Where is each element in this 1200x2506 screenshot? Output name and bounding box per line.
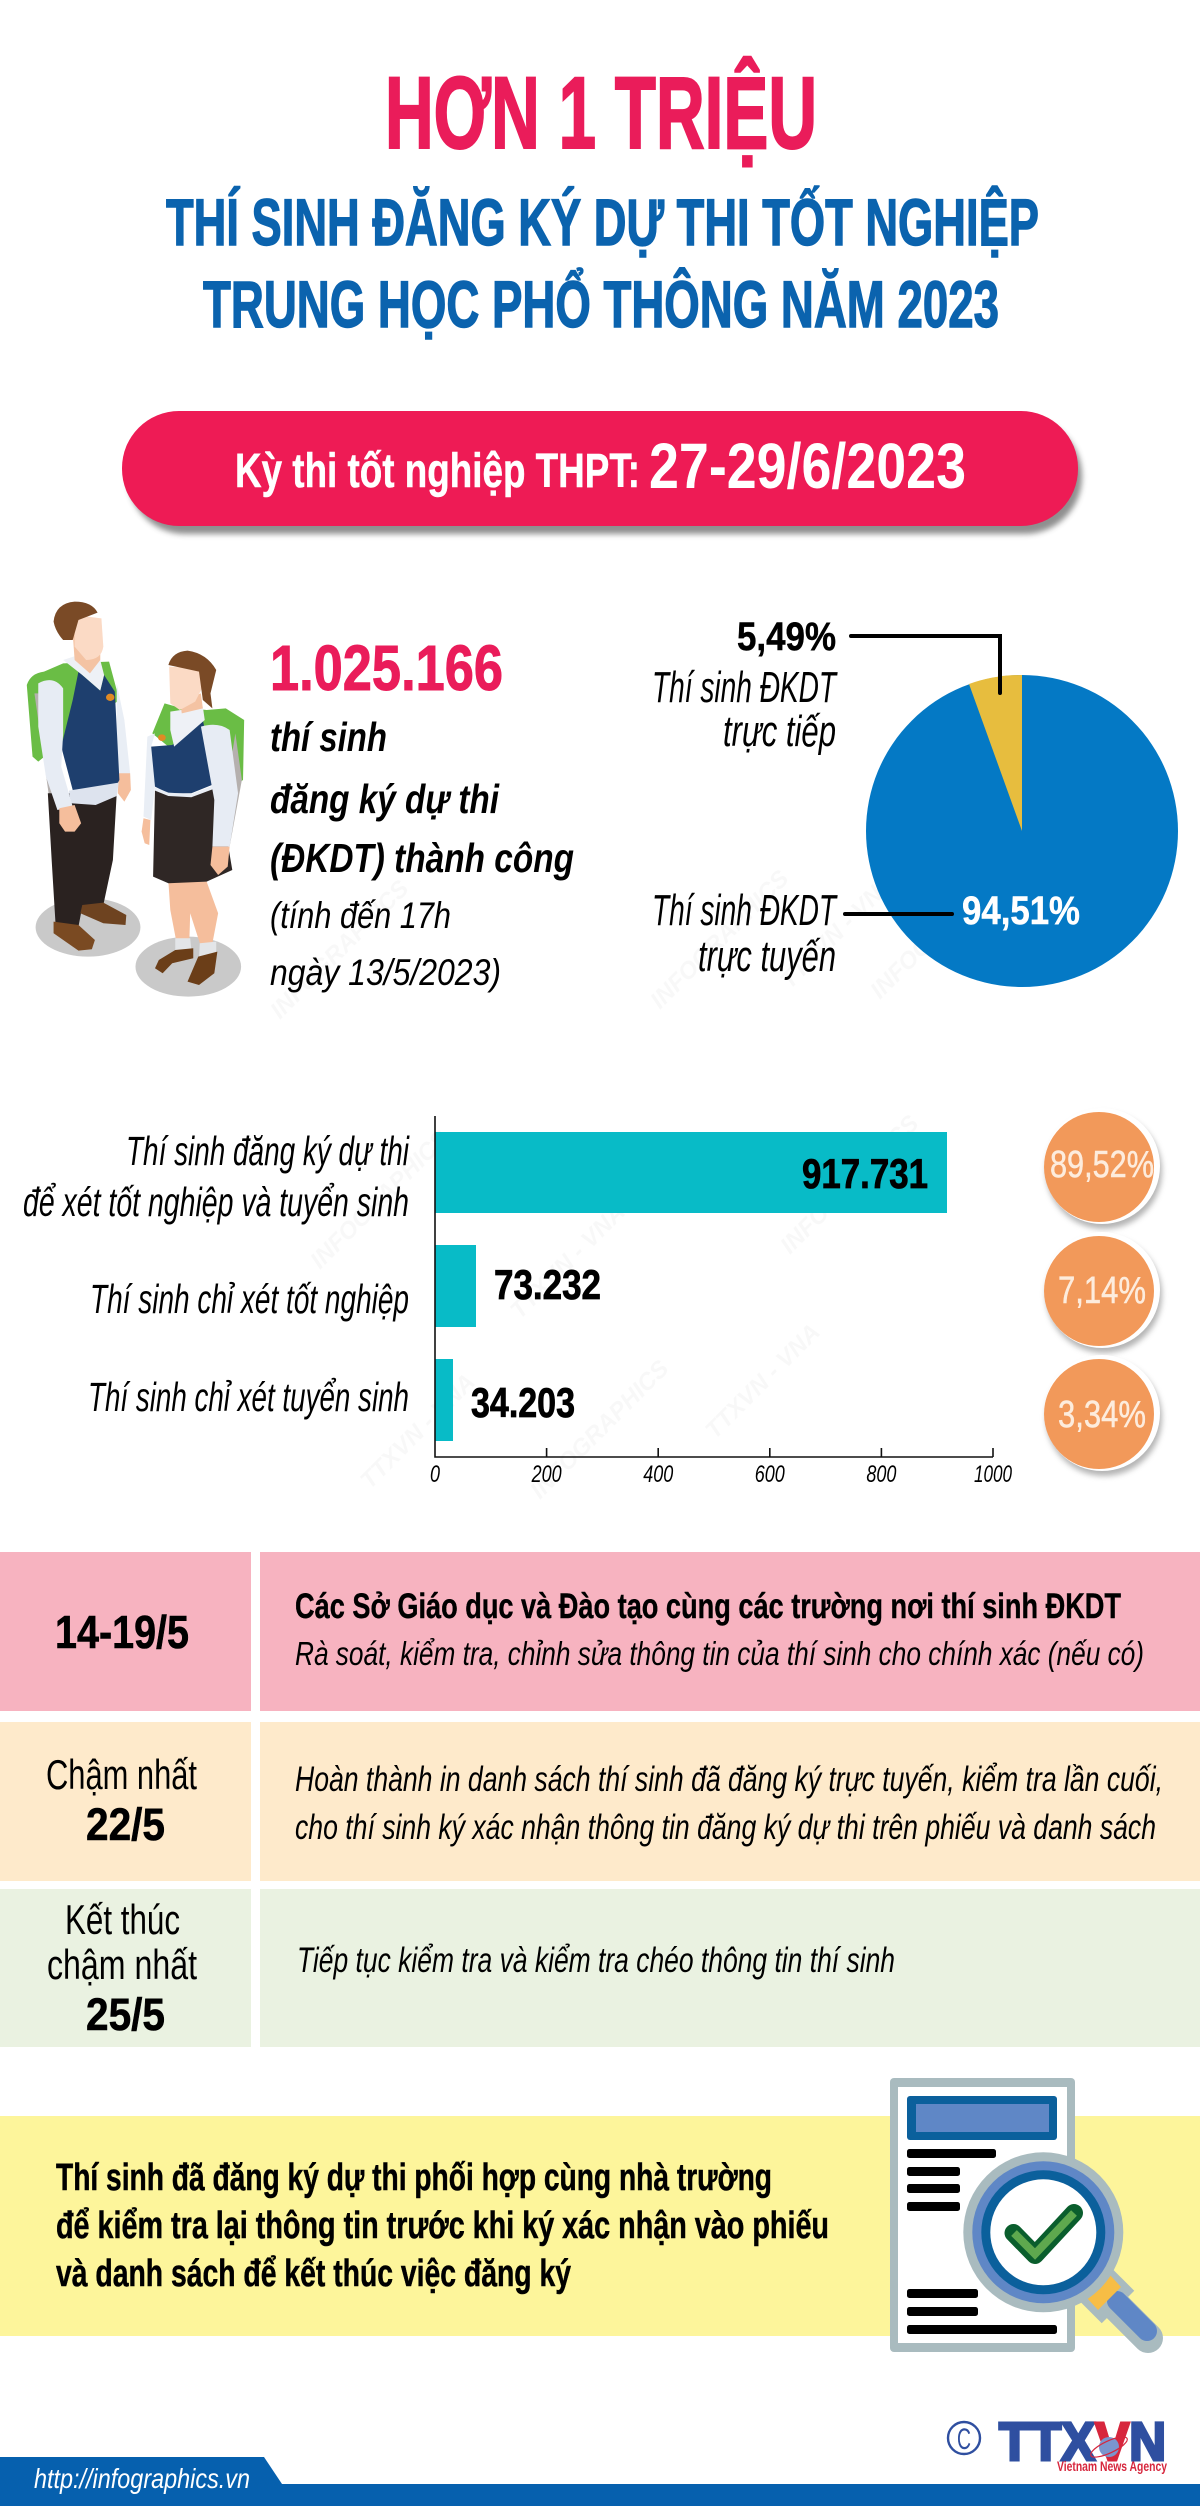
online share value: 94,51%: [962, 889, 1080, 933]
headline: HƠN 1 TRIỆU: HƠN 1 TRIỆU: [385, 56, 817, 170]
bar chart: candidates by purpose: [23, 1116, 1012, 1488]
date label: Chậm nhất: [46, 1751, 197, 1798]
description: Tiếp tục kiểm tra và kiểm tra chéo thông tin thí sinh: [297, 1941, 895, 1980]
copyright symbol: [948, 2422, 980, 2456]
watermarks: INFOGRAPHICS: [645, 865, 794, 1014]
watermarks: INFOGRAPHICS: [305, 1125, 454, 1274]
callout text: để kiểm tra lại thông tin trước khi ký xác nhận vào phiếu: [56, 2205, 829, 2247]
globe: [1099, 2437, 1119, 2457]
copyright symbol: C: [957, 2423, 971, 2456]
as-of date note: ngày 13/5/2023): [270, 952, 501, 993]
date label: Kết thúc: [65, 1896, 180, 1943]
date cell: [0, 1552, 251, 1711]
content cell: [260, 1889, 1200, 2047]
date: 22/5: [86, 1799, 165, 1850]
date label: chậm nhất: [47, 1941, 197, 1988]
total number: 1.025.166: [270, 632, 503, 704]
female student: [135, 651, 244, 997]
axis tick labels: 0: [430, 1461, 440, 1488]
value 34.203: 34.203: [471, 1379, 575, 1426]
value 73.232: 73.232: [494, 1261, 601, 1308]
wordmark: TTXVN: [999, 2412, 1166, 2472]
orbit: [1088, 2433, 1130, 2461]
as-of date note: [270, 895, 501, 993]
watermarks: TTXVN - VNA: [700, 1319, 826, 1444]
watermarks: [265, 855, 1014, 1504]
axis tick labels: 400: [643, 1461, 674, 1488]
exam label: Kỳ thi tốt nghiệp THPT:: [235, 445, 640, 498]
content cell: [260, 1722, 1200, 1881]
category label 1: [23, 1128, 410, 1225]
footer band: [0, 2457, 1200, 2506]
watermarks: INFOGRAPHICS: [265, 875, 414, 1024]
watermarks: TTXVN - VNA: [775, 869, 901, 994]
pie slice online: [866, 675, 1178, 987]
timeline row: 25/5: [0, 1889, 1200, 2047]
as-of date note: (tính đến 17h: [270, 895, 451, 936]
date label: [47, 1896, 197, 1988]
percentage badge 7,14%: 7,14%: [1058, 1270, 1146, 1312]
watermarks: INFOGRAPHICS: [775, 1110, 924, 1259]
title: [166, 56, 1039, 341]
bar 3: [435, 1359, 453, 1441]
watermarks: INFOGRAPHICS: [865, 855, 1014, 1004]
exam dates: 27-29/6/2023: [649, 430, 966, 502]
male student: [27, 602, 140, 957]
category label 1: Thí sinh đăng ký dự thi: [126, 1128, 410, 1174]
online label: Thí sinh ĐKDT: [652, 886, 838, 935]
direct label: Thí sinh ĐKDT: [652, 663, 838, 712]
category label 1: để xét tốt nghiệp và tuyển sinh: [23, 1179, 409, 1225]
axis tick labels: [430, 1461, 1012, 1488]
description: [295, 1760, 1163, 1847]
axes: [435, 1116, 993, 1457]
bar 1: [435, 1132, 947, 1213]
exam date pill: [122, 411, 1082, 534]
document: [890, 2078, 1075, 2352]
logo: TTXVN: [999, 2412, 1167, 2474]
date cell: [0, 1889, 251, 2047]
illustration: two students with backpacks: [27, 602, 244, 997]
leader line direct: [851, 636, 1000, 693]
percentage badge 89,52%: 89,52%: [1050, 1144, 1154, 1186]
direct label: [652, 663, 838, 756]
callout text: [56, 2157, 829, 2295]
icon: document with magnifier: [890, 2078, 1148, 2352]
callout text: và danh sách để kết thúc việc đăng ký: [56, 2253, 571, 2295]
description bold: thí sinh: [270, 714, 387, 760]
direct share value: 5,49%: [737, 615, 836, 659]
axis tick labels: 200: [531, 1461, 562, 1488]
axis tick labels: 800: [866, 1461, 897, 1488]
pie chart: registration method: [652, 615, 1178, 987]
percentage badge 3,34%: 3,34%: [1058, 1394, 1146, 1436]
watermarks: TTXVN - VNA: [505, 1199, 631, 1324]
online label: trực tuyến: [698, 932, 836, 981]
timeline row: 14-19/5: [0, 1552, 1200, 1711]
callout text: Thí sinh đã đăng ký dự thi phối hợp cùng nhà trường: [56, 2157, 772, 2199]
description bold: đăng ký dự thi: [270, 776, 500, 822]
watermarks: TTXVN - VNA: [355, 1369, 481, 1494]
watermarks: INFOGRAPHICS: [525, 1355, 674, 1504]
total candidates block: [270, 632, 574, 993]
axis tick labels: 600: [755, 1461, 785, 1488]
website url: http://infographics.vn: [34, 2463, 250, 2494]
axis tick labels: 1000: [974, 1461, 1012, 1488]
category label 2: Thí sinh chỉ xét tốt nghiệp: [90, 1276, 409, 1322]
direct label: trực tiếp: [723, 707, 836, 756]
leader line online: [845, 912, 952, 916]
percentage badge 7,14%: [1044, 1232, 1162, 1353]
date cell: [0, 1722, 251, 1881]
callout band: [0, 2116, 1200, 2336]
date: 25/5: [86, 1989, 165, 2040]
date: 14-19/5: [55, 1606, 189, 1658]
percentage badge 3,34%: [1044, 1355, 1162, 1476]
online label: [652, 886, 838, 981]
category label 3: Thí sinh chỉ xét tuyển sinh: [88, 1374, 409, 1420]
description bold: [270, 714, 574, 881]
bar 2: [435, 1245, 476, 1327]
pie slice direct: [969, 675, 1022, 831]
description bold: (ĐKDT) thành công: [270, 835, 574, 881]
percentage badge 89,52%: [1044, 1108, 1162, 1229]
value 917.731: 917.731: [802, 1150, 928, 1197]
timeline row: 22/5: [0, 1722, 1200, 1881]
content cell: [260, 1552, 1200, 1711]
magnifier: [963, 2152, 1148, 2338]
